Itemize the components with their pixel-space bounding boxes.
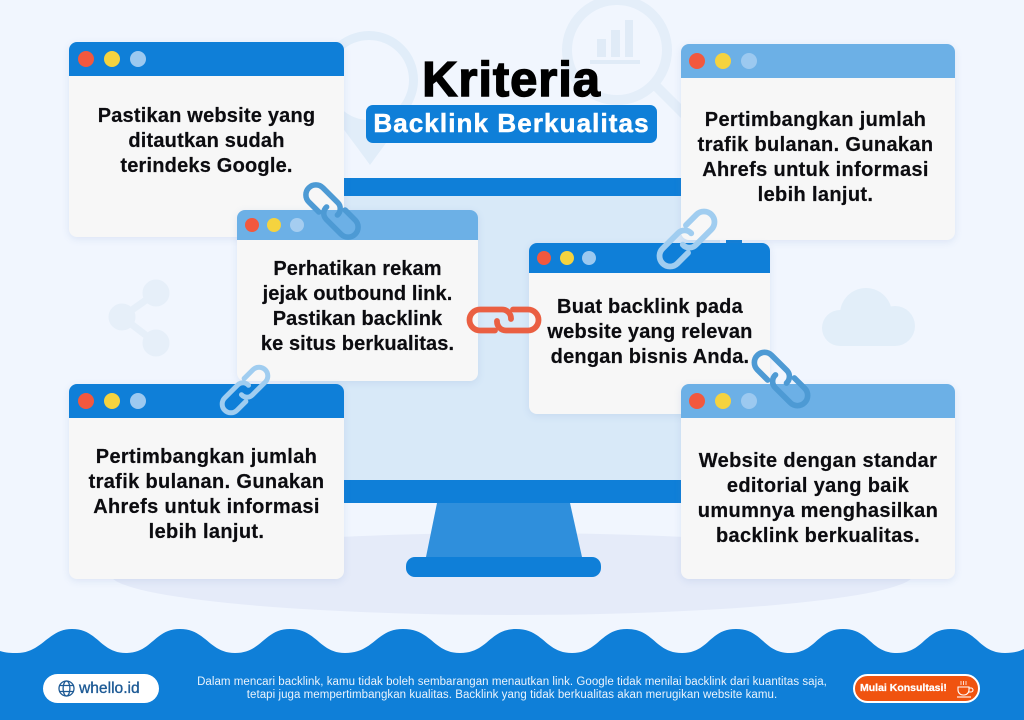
card text: jejak outbound link. [263, 283, 452, 305]
panel: card editorial [681, 384, 955, 579]
icon: globe [58, 680, 75, 697]
icon: coffee cup [957, 681, 974, 698]
icon: share [109, 280, 169, 356]
icon: chain dark top left [302, 181, 362, 241]
icon: chain dark right [750, 348, 812, 410]
panel: card traffic bottom [69, 384, 344, 579]
call to action button [853, 674, 980, 703]
footer description [197, 676, 827, 701]
subtitle pill: Backlink Berkualitas [373, 108, 650, 138]
card text: terindeks Google. [120, 155, 293, 177]
card text: Perhatikan rekam [273, 258, 442, 280]
card text: website yang relevan [547, 321, 753, 343]
card text: dengan bisnis Anda. [551, 346, 749, 368]
icon: chain light left [219, 364, 271, 416]
card text: Website dengan standar [699, 450, 937, 472]
card text: Pastikan backlink [273, 308, 442, 330]
icon: cloud [822, 288, 915, 346]
card text: Ahrefs untuk informasi [702, 159, 929, 181]
icon: chain orange center [470, 310, 538, 330]
window header [681, 44, 955, 78]
card text [698, 450, 938, 547]
monitor tab [726, 239, 742, 244]
monitor [300, 178, 720, 577]
card text [698, 109, 933, 206]
footer description: tetapi juga mempertimbangkan kualitas. Backlink yang tidak berkualitas akan merugikan website kamu. [247, 689, 777, 701]
floor ellipse [110, 533, 914, 615]
card text: Pertimbangkan jumlah [705, 109, 926, 131]
card text: Buat backlink pada [557, 296, 743, 318]
card text [98, 105, 315, 177]
window header [69, 42, 344, 76]
window header [681, 384, 955, 418]
card text [88, 446, 324, 543]
logo pill [43, 674, 159, 703]
icon: location pin [320, 31, 418, 165]
card text: trafik bulanan. Gunakan [89, 471, 324, 493]
window header [69, 384, 344, 418]
card text: lebih lanjut. [149, 521, 264, 543]
button text: Mulai Konsultasi! [860, 682, 947, 694]
card text: trafik bulanan. Gunakan [698, 134, 933, 156]
card text [547, 296, 753, 368]
icon: magnifier chart [567, 0, 690, 120]
window header [237, 210, 478, 240]
logo text: whello.id [79, 680, 140, 697]
panel: card outbound [237, 210, 478, 381]
window header [529, 243, 770, 273]
card text: lebih lanjut. [758, 184, 873, 206]
panel: card traffic top [681, 44, 955, 240]
footer description: Dalam mencari backlink, kamu tidak boleh sembarangan menautkan link. Google tidak menilai backlink dari kuantitas saja, [197, 676, 827, 688]
title: Kriteria [422, 53, 601, 107]
card text: editorial yang baik [727, 475, 909, 497]
card text: Pastikan website yang [98, 105, 315, 127]
card text: Ahrefs untuk informasi [93, 496, 320, 518]
card text: backlink berkualitas. [716, 525, 920, 547]
card text: ke situs berkualitas. [261, 333, 454, 355]
card text: ditautkan sudah [128, 130, 285, 152]
card text: Pertimbangkan jumlah [96, 446, 317, 468]
card text: umumnya menghasilkan [698, 500, 938, 522]
footer wave band [0, 629, 1024, 720]
panel: card indexed [69, 42, 344, 237]
panel: card relevant [529, 243, 770, 414]
icon: chain light top right [655, 207, 719, 271]
card text [261, 258, 454, 355]
